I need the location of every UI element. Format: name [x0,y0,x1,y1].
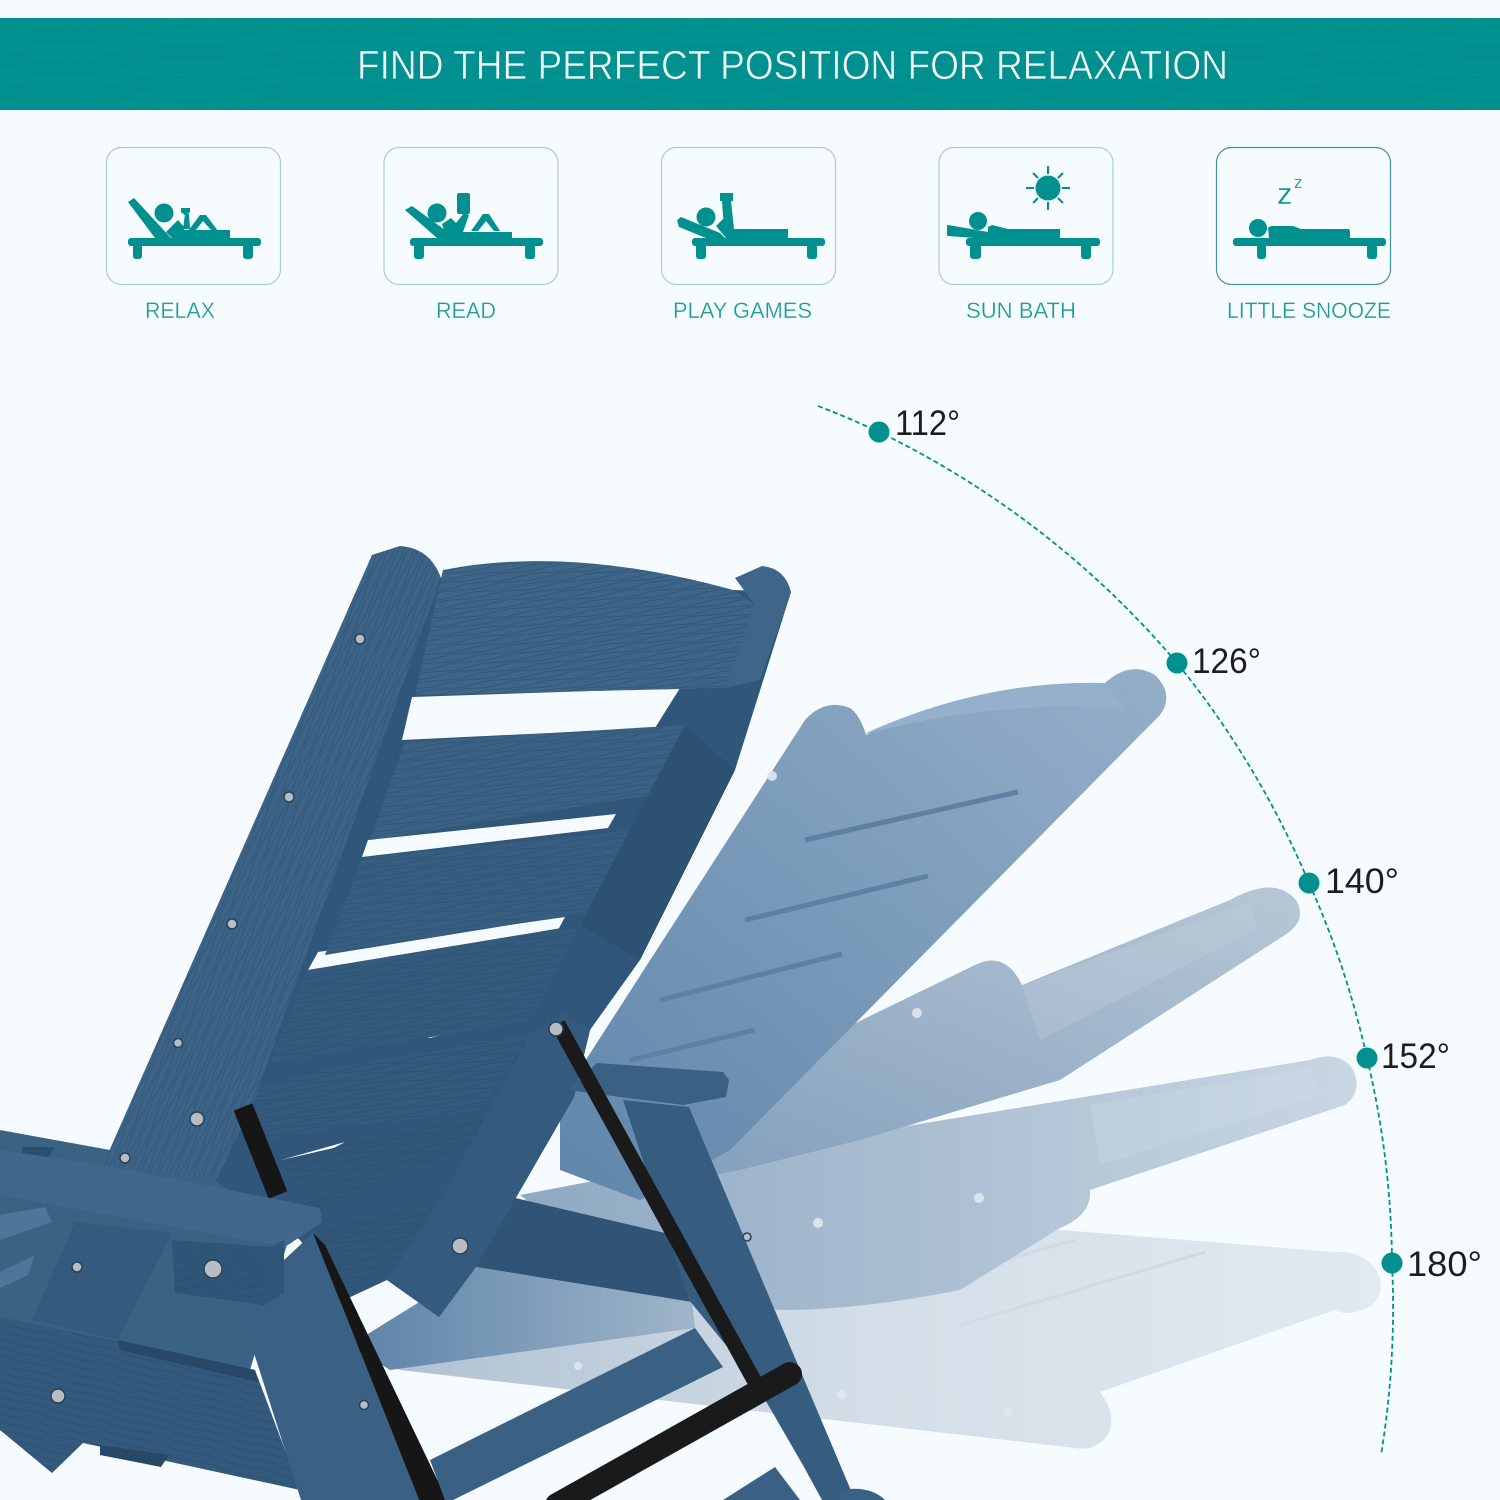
right armrest [568,1063,729,1105]
left armrest [0,1150,322,1305]
label: relax: RELAX [145,298,215,323]
angle arc [818,404,1482,1455]
icon: play games [662,148,836,284]
chair left rail [103,546,441,1180]
title banner [0,18,1500,110]
icon: sun bath [939,148,1113,284]
icon: little snooze: z [1294,173,1302,192]
black strap right [558,1024,755,1382]
chair right rail [387,566,791,1317]
marker 126: 126° [1192,642,1261,681]
strap lower left [313,1233,447,1500]
icon labels [145,298,1391,323]
chair left leg [238,1233,419,1500]
ghost backrest 140 degrees [600,888,1300,1190]
icon: relax [106,148,280,284]
marker 112 [868,404,960,443]
label: read: READ [436,298,496,323]
bolts [51,634,751,1410]
chair back slats [270,561,755,1065]
chair right leg [623,1100,885,1500]
label: play games: PLAY GAMES [673,298,812,323]
chair seat behind [0,1130,300,1370]
chair front beam [0,1317,300,1490]
chair lower back slats [253,1033,531,1300]
marker 180: 180° [1407,1245,1482,1284]
icon: little snooze: z [1277,176,1292,211]
label: sun bath: SUN BATH [966,298,1076,323]
chair cross bar [430,1328,723,1500]
icon: read [384,148,558,284]
chair back beam [476,1197,695,1302]
icon: little snooze [1216,148,1390,284]
black rod [557,1374,790,1500]
marker 152: 152° [1381,1037,1450,1076]
ghost bolts [574,771,1013,1418]
ghost backrest 180 degrees [360,1205,1381,1449]
title banner: FIND THE PERFECT POSITION FOR RELAXATION [357,42,1228,88]
ghost backrest 126 degrees [560,669,1166,1200]
label: little snooze: LITTLE SNOOZE [1227,298,1391,323]
ghost backrest 152 degrees [520,1056,1357,1310]
marker 112: 112° [895,404,960,443]
back gaps [281,688,680,1160]
icon row [106,148,1390,284]
marker 140: 140° [1325,862,1399,901]
chair back plate [215,555,791,1317]
ghost base under seat [350,1267,695,1370]
strap upper left [243,1107,278,1195]
chair left diagonal support [32,1222,172,1340]
